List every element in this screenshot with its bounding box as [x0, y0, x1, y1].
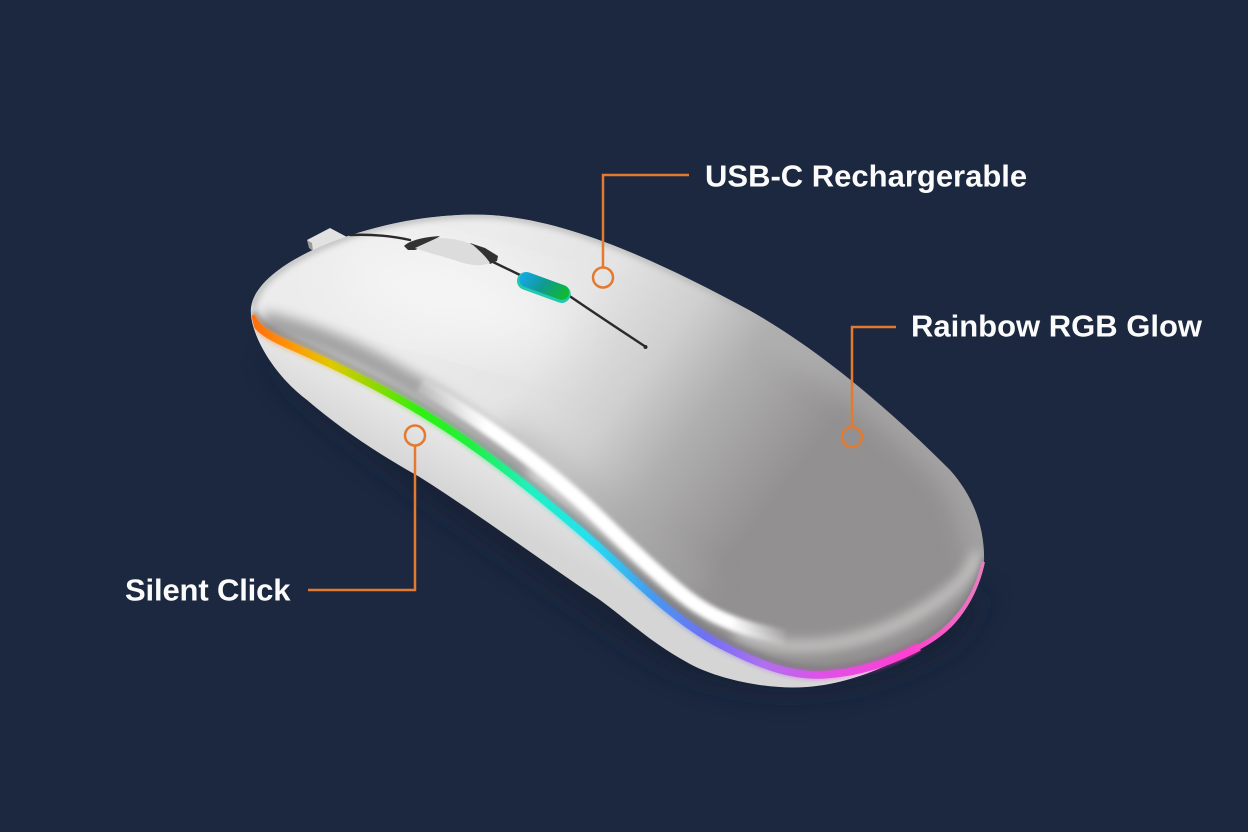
bottom bevel highlight: [735, 552, 978, 646]
strip glow: [251, 316, 919, 675]
callout: Silent Click: [125, 426, 425, 608]
strip tail: [919, 562, 984, 647]
callout: Silent Click: Silent Click: [125, 572, 291, 608]
shell shading: [253, 215, 986, 670]
callout: Rainbow RGB Glow: [842, 308, 1203, 447]
mouse illustration: [251, 215, 986, 688]
USB-C connector: [307, 228, 347, 251]
mouse shadow: [262, 355, 990, 692]
button base: [514, 269, 573, 306]
infographic: mouse with feature callouts: [126, 164, 1202, 688]
top shell: [251, 215, 984, 675]
white highlight band: [420, 385, 785, 637]
bright area of the shell: [347, 224, 542, 339]
side body white: [251, 316, 984, 688]
callout: USB-C Rechargerable: USB-C Rechargerable: [705, 158, 1027, 194]
RGB DPI button: [514, 269, 573, 306]
button top: [517, 270, 571, 302]
grey flank beside highlight: [502, 419, 598, 502]
strip core: [251, 316, 919, 675]
lighter rim on the right edge: [780, 335, 980, 560]
grey rim along the top edge: [253, 215, 749, 310]
callout: USB-C Rechargerable: [593, 158, 1027, 288]
dark line above strip: [253, 311, 986, 670]
seam end dot: [644, 345, 648, 349]
dark band at the rear edge: [262, 322, 530, 470]
RGB light strip: [251, 316, 984, 675]
scroll wheel: [404, 236, 498, 265]
centre seam line: [350, 235, 646, 347]
callout: Rainbow RGB Glow: Rainbow RGB Glow: [911, 308, 1203, 344]
